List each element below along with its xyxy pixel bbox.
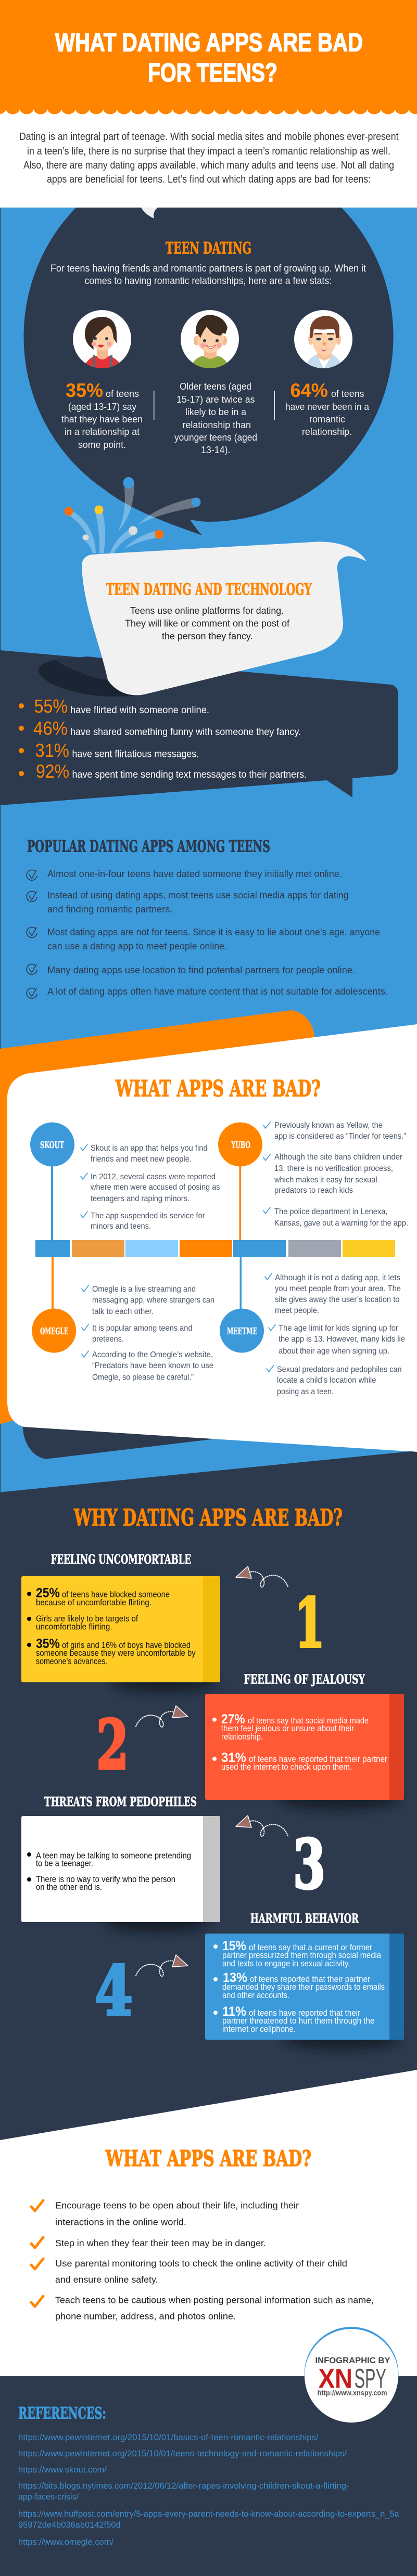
references list: 95972de4b036ab0142f50d — [18, 2520, 121, 2530]
reason 4 card: 13% — [223, 1970, 247, 1985]
reason 1 card: because of uncomfortable flirting. — [36, 1598, 151, 1607]
reason 2 card: them feel jealous or unsure about their — [221, 1724, 354, 1733]
heading: teen dating: TEEN DATING — [166, 239, 251, 258]
technology text: They will like or comment on the post of — [125, 618, 290, 628]
dark reasons section — [0, 1451, 417, 2140]
reason 3 card: on the other end is. — [36, 1883, 102, 1892]
blue background section — [0, 208, 417, 1498]
Xnspy badge: XN — [319, 2364, 352, 2394]
avatar: girl — [73, 310, 131, 369]
arrow to reason 4 — [136, 1955, 188, 1976]
Yubo details — [263, 1121, 408, 1228]
dark footer — [0, 2376, 417, 2576]
reason 2 card: of teens say that social media made — [248, 1716, 369, 1725]
intro paragraph: apps are beneficial for teens. Let’s find out which dating apps are bad for teens: — [47, 174, 371, 185]
stat: 64 percent: relationship. — [302, 427, 352, 437]
stat list: online flirting: 31% — [35, 740, 69, 761]
Yubo details: The police department in Lenexa, — [274, 1207, 387, 1216]
reason 1 card: Girls are likely to be targets of — [36, 1614, 138, 1624]
header banner — [0, 0, 417, 114]
badge: Yubo — [218, 1123, 262, 1166]
Yubo details: Although the site bans children under — [274, 1153, 403, 1162]
teen dating intro text: comes to having romantic relationships, here are a few stats: — [84, 276, 332, 287]
popular apps checklist — [27, 869, 388, 998]
advice checklist: phone number, address, and photos online. — [55, 2311, 236, 2322]
badge: Yubo: YUBO — [231, 1140, 250, 1151]
Omegle details: talk to each other. — [92, 1307, 154, 1316]
dark shadow under white panel — [23, 1423, 216, 1459]
teen dating speech bubble — [23, 208, 394, 535]
reason 4 card: internet or cellphone. — [222, 2025, 296, 2034]
reason 1 card: of girls and 16% of boys have blocked — [62, 1641, 191, 1650]
stat: 35 percent: that they have been — [61, 414, 143, 424]
avatar: boy with dark hair — [181, 310, 239, 369]
Omegle details: Omegle, so please be careful.” — [92, 1373, 194, 1382]
reason 3 card — [21, 1816, 220, 1922]
teen dating intro text — [50, 263, 367, 287]
stat list: online flirting: 46% — [33, 718, 68, 739]
reason 2 card: used the internet to check upon them. — [221, 1762, 352, 1772]
stat: older teens: 13-14). — [201, 445, 230, 455]
stat: older teens: 15-17) are twice as — [176, 394, 255, 405]
reason 4 card: and other accounts. — [222, 1991, 289, 2000]
reason 2 card: 27% — [221, 1712, 245, 1727]
technology text: the person they fancy. — [162, 631, 253, 641]
stat list: online flirting: have spent time sending text messages to their partners. — [72, 769, 307, 780]
references list — [18, 2433, 399, 2547]
MeetMe details: The age limit for kids signing up for — [279, 1324, 399, 1333]
stat list: online flirting: 55% — [34, 695, 68, 717]
timeline connector lines — [51, 1165, 242, 1311]
stat: 64 percent: 64% — [290, 380, 328, 401]
MeetMe details: you meet people from your area. The — [275, 1284, 401, 1293]
badge: Skout: SKOUT — [40, 1140, 64, 1151]
Xnspy badge — [304, 2327, 399, 2423]
stat list: online flirting: have sent flirtatious messages. — [72, 749, 199, 759]
Skout details: The app suspended its service for — [91, 1212, 205, 1220]
arrow to reason 2 — [136, 1706, 188, 1727]
numeral 2: 2 — [96, 1705, 129, 1784]
reason 1 card: uncomfortable flirting. — [36, 1622, 112, 1631]
Yubo details: Previously known as Yellow, the — [274, 1121, 383, 1130]
badge: Skout — [30, 1123, 74, 1166]
left edge line — [0, 208, 1, 1492]
references list: https://bits.blogs.nytimes.com/2012/06/12/after-rapes-involving-children-skout-a-flirting- — [18, 2481, 349, 2491]
reason 4 card: and texts to engage in sexual activity. — [222, 1959, 350, 1968]
stat: 64 percent: of teens — [331, 389, 364, 399]
reason 2 heading: FEELING OF JEALOUSY — [244, 1672, 365, 1686]
colour bar — [35, 1240, 395, 1257]
Skout details — [81, 1144, 220, 1231]
stat list: online flirting — [19, 695, 307, 782]
orange check icons — [31, 2200, 43, 2307]
reason 3 card: to be a teenager. — [36, 1859, 93, 1869]
card shadows — [104, 1671, 398, 2049]
reason 4 card — [205, 1934, 404, 2040]
heading: what apps are bad: WHAT APPS ARE BAD? — [115, 1076, 321, 1102]
stat: older teens: younger teens (aged — [174, 432, 257, 443]
Omegle details — [82, 1285, 214, 1382]
Xnspy badge: SPY — [355, 2364, 386, 2394]
Omegle details: Omegle is a live streaming and — [92, 1285, 196, 1294]
reason 3 card: A teen may be talking to someone pretending — [36, 1851, 191, 1860]
MeetMe details — [265, 1273, 405, 1396]
advice checklist — [31, 2200, 374, 2322]
Omegle details: It is popular among teens and — [92, 1324, 193, 1333]
popular apps checklist: Many dating apps use location to find potential partners for people online. — [47, 965, 355, 975]
stat list: online flirting: have shared something funny with someone they fancy. — [70, 727, 301, 738]
Skout details: friends and meet new people. — [91, 1155, 192, 1164]
heading: teen dating and technology: TEEN DATING AND TECHNOLOGY — [106, 581, 312, 599]
stat: 35 percent: some point. — [78, 440, 126, 450]
stat: 64 percent: have never been in a — [285, 402, 370, 412]
Omegle details: preteens. — [92, 1335, 124, 1344]
reason 4 card: 15% — [222, 1939, 246, 1953]
advice checklist: Encourage teens to be open about their life, including their — [55, 2200, 299, 2211]
references heading: REFERENCES: — [18, 2404, 106, 2423]
Xnspy badge: http://www.xnspy.com — [318, 2389, 387, 2397]
badge: MeetMe — [220, 1309, 264, 1353]
Omegle details: messaging app, where strangers can — [92, 1296, 214, 1305]
reason 1 card: 35% — [36, 1637, 60, 1651]
shadow under white bubble — [39, 656, 138, 697]
reason 2 card — [205, 1694, 404, 1800]
reason 1 heading: FEELING UNCOMFORTABLE — [51, 1552, 191, 1567]
numeral 3: 3 — [293, 1825, 325, 1904]
teen dating and technology speech bubble — [82, 542, 367, 695]
Skout details: In 2012, several cases were reported — [91, 1173, 216, 1181]
MeetMe details: about their age when signing up. — [279, 1347, 389, 1356]
reason 1 card: of teens have blocked someone — [62, 1590, 170, 1600]
check icons — [27, 870, 37, 998]
Skout details: teenagers and raping minors. — [91, 1194, 189, 1203]
MeetMe details: Sexual predators and pedophiles can — [277, 1365, 402, 1374]
arrow to reason 3 — [236, 1815, 288, 1836]
badge: MeetMe: MEETME — [227, 1326, 257, 1337]
heading: what apps are bad (parents): WHAT APPS ARE BAD? — [105, 2146, 311, 2171]
stat dividers — [154, 391, 275, 420]
Skout details: where men were accused of posing as — [90, 1183, 220, 1192]
heading: popular dating apps: POPULAR DATING APPS AMONG TEENS — [27, 838, 270, 856]
reason 3 card: There is no way to verify who the person — [36, 1875, 175, 1884]
reason 4 card: demanded they share their passwords to emails — [222, 1982, 385, 1992]
MeetMe details: the app is 13. However, many kids lie — [279, 1335, 405, 1344]
reason 2 card: relationship. — [221, 1732, 263, 1742]
stat: 35 percent — [61, 380, 143, 450]
white apps panel — [7, 1024, 417, 1452]
references list: https://www.pewinternet.org/2015/10/01/teens-technology-and-romantic-relationships/ — [18, 2449, 347, 2458]
Skout details: Skout is an app that helps you find — [91, 1144, 208, 1153]
reason 4 card: partner threatened to hurt them through the — [222, 2016, 375, 2026]
badge: Omegle — [32, 1309, 76, 1353]
MeetMe details: posing as a teen. — [277, 1387, 334, 1396]
references list: app-faces-crisis/ — [18, 2492, 79, 2502]
stat list: online flirting: 92% — [36, 761, 69, 782]
advice checklist: Use parental monitoring tools to check the online activity of their child — [55, 2258, 347, 2269]
Yubo details: app is considered as “Tinder for teens.” — [274, 1132, 406, 1141]
stat: older teens: Older teens (aged — [180, 381, 251, 392]
Yubo details: 13, there is no verification process, — [274, 1164, 393, 1173]
stat: older teens: relationship than — [182, 420, 251, 430]
reason 4 card: of teens say that a current or former — [249, 1943, 372, 1952]
reason 2 card: 31% — [221, 1750, 246, 1765]
reason 4 card: partner pressurized them through social media — [222, 1951, 382, 1960]
orange panel frame — [0, 1010, 314, 1424]
numeral 1: 1 — [295, 1583, 325, 1663]
Omegle details: According to the Omegle’s website, — [92, 1350, 213, 1359]
advice checklist: interactions in the online world. — [55, 2217, 186, 2227]
intro paragraph — [19, 131, 399, 185]
stat: 35 percent: of teens — [106, 389, 139, 399]
MeetMe details: Although it is not a dating app, it lets — [275, 1273, 400, 1282]
MeetMe details: meet people. — [275, 1306, 319, 1315]
MeetMe details: site gives away the user’s location to — [275, 1295, 400, 1304]
reason 1 card: someone’s advances. — [36, 1657, 107, 1666]
Skout details: minors and teens. — [91, 1222, 151, 1231]
stat: 64 percent — [285, 380, 370, 437]
Xnspy badge: INFOGRAPHIC BY — [315, 2355, 390, 2365]
advice checklist: Step in when they fear their teen may be in danger. — [55, 2238, 266, 2248]
Omegle details: “Predators have been known to use — [92, 1361, 213, 1370]
references list: https://www.omegle.com/ — [18, 2538, 113, 2547]
reason 4 heading: HARMFUL BEHAVIOR — [250, 1911, 359, 1926]
stat: 35 percent: 35% — [66, 380, 103, 401]
stat: 64 percent: romantic — [309, 414, 345, 424]
confetti streaks — [65, 477, 201, 553]
teen dating intro text: For teens having friends and romantic partners is part of growing up. When it — [50, 263, 367, 274]
reason 3 heading: THREATS FROM PEDOPHILES — [44, 1794, 197, 1809]
advice checklist: Teach teens to be cautious when posting personal information such as name, — [55, 2295, 374, 2305]
reason 4 card: of teens reported that their partner — [250, 1975, 370, 1984]
Yubo details: predators to reach kids — [274, 1186, 353, 1195]
reason 1 card: someone because they were uncomfortable by — [36, 1648, 196, 1658]
popular apps checklist: Almost one-in-four teens have dated someone they initially met online. — [47, 869, 342, 879]
references list: https://www.skout.com/ — [18, 2465, 107, 2475]
references list: https://www.huffpost.com/entry/5-apps-every-parent-needs-to-know-about-according-to-experts_n_5a — [18, 2509, 399, 2519]
popular apps checklist: and finding romantic partners. — [47, 904, 173, 915]
reason 1 card — [21, 1576, 220, 1682]
stat list: online flirting: have flirted with someone online. — [70, 705, 209, 716]
popular apps checklist: can use a dating app to meet people online. — [47, 941, 227, 951]
reason 1 card: 25% — [36, 1586, 60, 1601]
avatar: boy with brown hair — [294, 310, 352, 369]
numeral 4: 4 — [95, 1951, 133, 2031]
reason 4 card: 11% — [222, 2004, 246, 2019]
popular apps checklist: Instead of using dating apps, most teens use social media apps for dating — [47, 890, 349, 900]
badge: Omegle: OMEGLE — [40, 1326, 68, 1337]
stat: 35 percent: in a relationship at — [65, 427, 140, 437]
arrow to reason 1 — [236, 1566, 288, 1587]
advice checklist: and ensure online safety. — [55, 2274, 158, 2285]
popular apps checklist: A lot of dating apps often have mature content that is not suitable for adolescents. — [47, 986, 388, 997]
technology text: Teens use online platforms for dating. — [130, 606, 284, 616]
stat: older teens: likely to be in a — [185, 407, 247, 417]
small light wedge at top of bubble — [141, 208, 158, 218]
references list: https://www.pewinternet.org/2015/10/01/basics-of-teen-romantic-relationships/ — [18, 2433, 319, 2442]
reason 2 card: of teens have reported that their partner — [249, 1755, 387, 1764]
dark stats panel — [0, 650, 398, 805]
title — [55, 28, 363, 87]
title: FOR TEENS? — [148, 58, 277, 87]
popular apps checklist: Most dating apps are not for teens. Since it is easy to lie about one’s age, anyone — [47, 927, 380, 937]
Yubo details: which makes it easy for sexual — [274, 1176, 377, 1184]
stat: older teens — [174, 381, 257, 455]
MeetMe details: locate a child’s location while — [277, 1376, 376, 1385]
technology text — [125, 606, 290, 641]
reason 4 card: of teens have reported that their — [249, 2008, 360, 2018]
stat: 35 percent: (aged 13-17) say — [68, 402, 136, 412]
